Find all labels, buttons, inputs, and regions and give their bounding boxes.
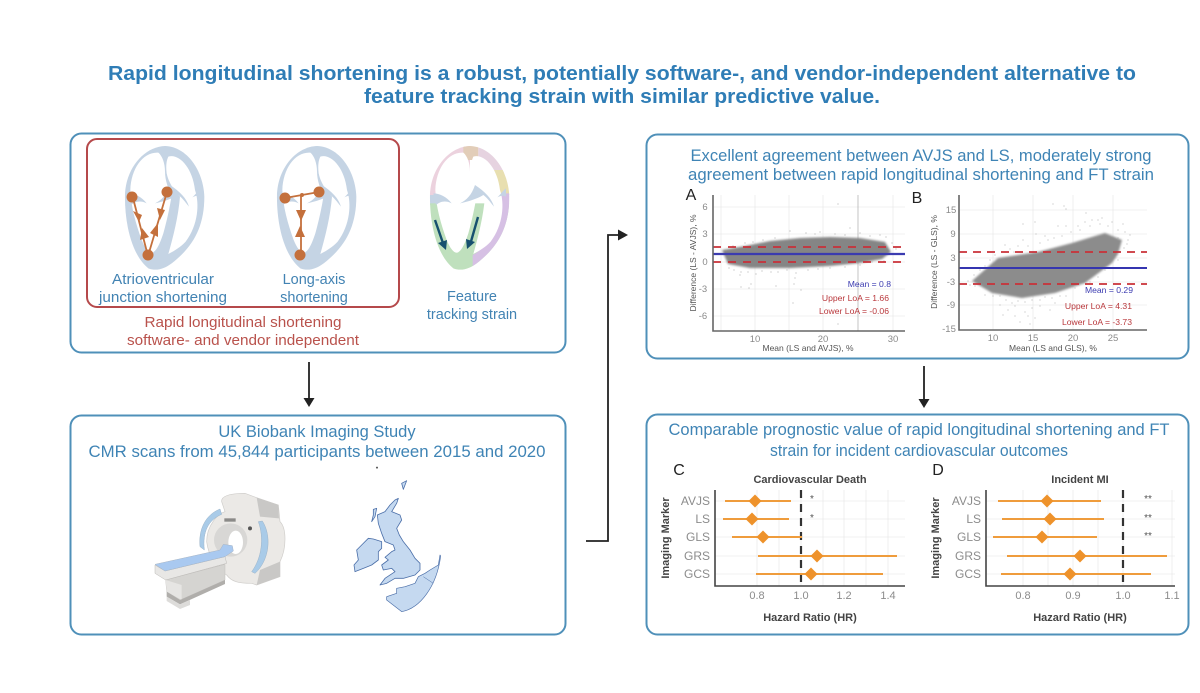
chart: Bland-Altman B: B — [912, 190, 922, 207]
chart: forest plot cardiovascular death — [660, 462, 905, 624]
chart: forest plot incident MI: ** — [1144, 494, 1152, 505]
heading: prognostic value — [668, 421, 1170, 460]
label: long-axis shortening: shortening — [280, 290, 348, 306]
chart: Bland-Altman B: Upper LoA = 4.31 — [1065, 301, 1132, 311]
chart: Bland-Altman B: Mean (LS and GLS), % — [1009, 343, 1097, 353]
chart: forest plot cardiovascular death: Cardiovascular Death — [753, 474, 867, 486]
chart: Bland-Altman B: Difference (LS - GLS), % — [929, 215, 939, 309]
panel: UK Biobank imaging study — [70, 416, 566, 634]
chart: forest plot incident MI: GLS — [957, 530, 981, 544]
chart: forest plot incident MI: 0.8 — [1015, 590, 1031, 602]
chart: Bland-Altman A: 6 — [702, 202, 708, 213]
chart: Bland-Altman B: 9 — [950, 229, 956, 240]
label: rapid longitudinal shortening: software- and vendor independent — [127, 333, 359, 349]
heading: UK Biobank — [88, 423, 546, 461]
chart: Bland-Altman B — [912, 190, 1147, 353]
label: rapid longitudinal shortening: Rapid longitudinal shortening — [144, 315, 342, 331]
icon: map of UK and Ireland — [354, 467, 441, 612]
chart: forest plot cardiovascular death: Imaging Marker — [660, 497, 672, 579]
icon: heart long-axis shortening — [277, 146, 356, 270]
chart: Bland-Altman A: Mean = 0.8 — [848, 279, 891, 289]
chart: Bland-Altman A: -6 — [699, 311, 707, 322]
chart: Bland-Altman A: Upper LoA = 1.66 — [822, 293, 889, 303]
chart: Bland-Altman B: 10 — [988, 333, 998, 344]
chart: Bland-Altman B: 25 — [1108, 333, 1118, 344]
heading: agreement — [688, 147, 1154, 184]
chart: Bland-Altman A: 3 — [702, 229, 708, 240]
chart: forest plot incident MI: Imaging Marker — [930, 497, 942, 579]
chart: forest plot cardiovascular death: AVJS — [681, 494, 710, 508]
chart: forest plot incident MI: 0.9 — [1065, 590, 1081, 602]
rapid longitudinal shortening box — [87, 139, 399, 307]
chart: forest plot cardiovascular death: Hazard Ratio (HR) — [763, 612, 857, 624]
chart: forest plot incident MI: 1.1 — [1164, 590, 1180, 602]
chart: forest plot cardiovascular death: 1.0 — [793, 590, 809, 602]
chart: Bland-Altman A — [686, 187, 905, 353]
chart: forest plot incident MI: Incident MI — [1051, 474, 1109, 486]
chart: Bland-Altman A: -3 — [699, 284, 707, 295]
label: feature tracking strain: tracking strain — [427, 307, 517, 323]
heading: prognostic value: strain for incident cardiovascular outcomes — [770, 442, 1068, 460]
label: feature tracking strain: Feature — [447, 289, 497, 305]
chart: Bland-Altman A: Mean (LS and AVJS), % — [762, 343, 854, 353]
label: atrioventricular junction shortening: junction shortening — [98, 290, 227, 306]
chart: Bland-Altman B: 3 — [950, 253, 956, 264]
panel: agreement — [646, 134, 1188, 358]
chart: forest plot cardiovascular death: GRS — [684, 549, 710, 563]
heading: UK Biobank: UK Biobank Imaging Study — [218, 423, 416, 441]
label: rapid longitudinal shortening — [127, 315, 359, 349]
chart: forest plot incident MI: 1.0 — [1115, 590, 1131, 602]
label: feature tracking strain — [427, 289, 517, 323]
chart: Bland-Altman A: 10 — [750, 334, 760, 345]
chart: Bland-Altman B: Mean = 0.29 — [1085, 285, 1133, 295]
chart: forest plot cardiovascular death: 1.2 — [836, 590, 852, 602]
heading: prognostic value: Comparable prognostic value of rapid longitudinal shortening and FT — [668, 421, 1170, 439]
chart: Bland-Altman A: Difference (LS - AVJS), % — [688, 214, 698, 312]
chart: forest plot incident MI: D — [932, 462, 944, 479]
chart: forest plot incident MI: ** — [1144, 513, 1152, 524]
chart: forest plot incident MI — [930, 462, 1180, 624]
chart: Bland-Altman A: Lower LoA = -0.06 — [819, 306, 889, 316]
chart: Bland-Altman B: Lower LoA = -3.73 — [1062, 317, 1132, 327]
chart: forest plot cardiovascular death: * — [810, 494, 814, 505]
chart: forest plot cardiovascular death: 0.8 — [749, 590, 765, 602]
chart: forest plot cardiovascular death: 1.4 — [880, 590, 896, 602]
chart: forest plot incident MI: GRS — [955, 549, 981, 563]
chart: forest plot incident MI: GCS — [955, 567, 981, 581]
chart: Bland-Altman B: 20 — [1068, 333, 1078, 344]
chart: forest plot incident MI: AVJS — [952, 494, 981, 508]
arrow: panel 2 to panel 3 — [586, 230, 628, 541]
heading: UK Biobank: CMR scans from 45,844 participants between 2015 and 2020 — [88, 443, 546, 461]
label: atrioventricular junction shortening: Atrioventricular — [112, 272, 214, 288]
chart: Bland-Altman B: -9 — [947, 300, 955, 311]
chart: forest plot cardiovascular death: GLS — [686, 530, 710, 544]
chart: forest plot incident MI: Hazard Ratio (HR) — [1033, 612, 1127, 624]
chart: forest plot cardiovascular death: LS — [695, 512, 710, 526]
chart: forest plot incident MI: ** — [1144, 531, 1152, 542]
chart: forest plot incident MI: LS — [966, 512, 981, 526]
heading: agreement: Excellent agreement between AVJS and LS, moderately strong — [690, 147, 1152, 165]
chart: forest plot cardiovascular death: * — [810, 513, 814, 524]
chart: Bland-Altman B: 15 — [1028, 333, 1038, 344]
label: long-axis shortening — [280, 272, 348, 306]
title: Rapid longitudinal shortening is a robust, potentially software-, and vendor-independent alternative to — [108, 62, 1136, 85]
icon: heart atrioventricular junction shortening — [125, 146, 204, 270]
title — [108, 62, 1136, 108]
chart: Bland-Altman A: 0 — [702, 257, 708, 268]
chart: Bland-Altman B: -15 — [942, 324, 956, 335]
arrow: panel 1 to panel 2 — [304, 362, 314, 407]
chart: forest plot cardiovascular death: C — [673, 462, 685, 479]
title: feature tracking strain with similar predictive value. — [364, 85, 880, 108]
chart: Bland-Altman A: 20 — [818, 334, 828, 345]
icon: heart feature tracking strain — [430, 146, 510, 270]
chart: Bland-Altman A: 30 — [888, 334, 898, 345]
arrow: panel 3 to panel 4 — [918, 366, 930, 408]
chart: Bland-Altman B: -3 — [947, 277, 955, 288]
heading: agreement: agreement between rapid longitudinal shortening and FT strain — [688, 166, 1154, 184]
label: atrioventricular junction shortening — [98, 272, 227, 306]
chart: forest plot cardiovascular death: GCS — [684, 567, 710, 581]
panel: cardiac measurements — [70, 134, 566, 352]
icon: MRI scanner — [155, 493, 285, 609]
chart: Bland-Altman A: A — [686, 187, 697, 204]
panel: prognostic value — [646, 414, 1188, 634]
label: long-axis shortening: Long-axis — [283, 272, 345, 288]
chart: Bland-Altman B: 15 — [946, 205, 956, 216]
